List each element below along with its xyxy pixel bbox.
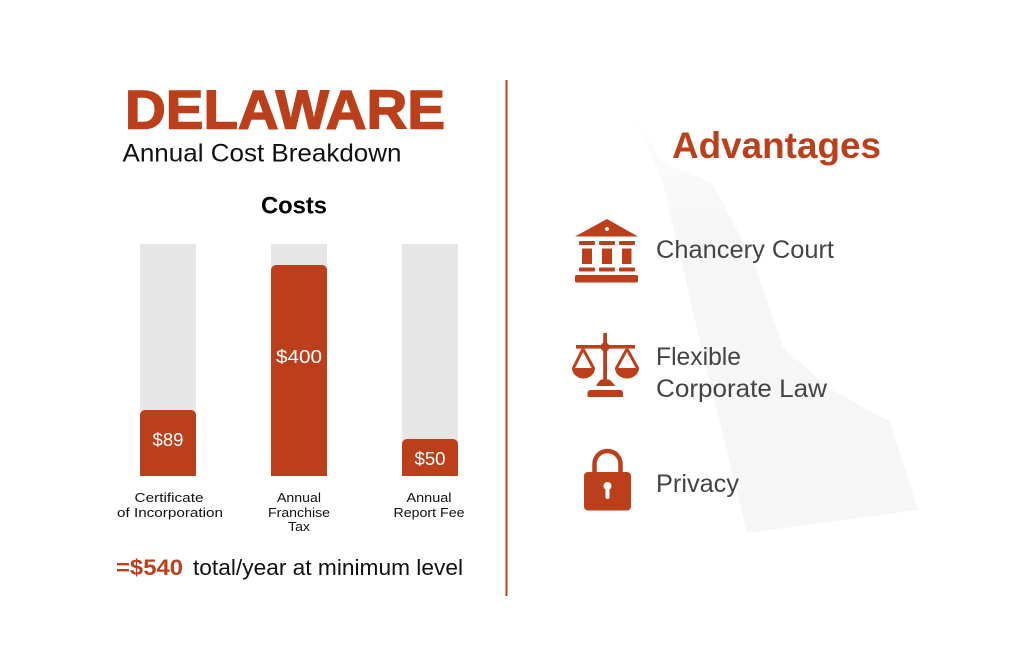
label: annual report fee: Report Fee: [394, 505, 464, 520]
label: annual franchise tax: Franchise: [268, 505, 330, 520]
subtitle: Annual Cost Breakdown: [122, 140, 402, 168]
icon: padlock: [584, 451, 631, 510]
label: certificate of incorporation: [117, 490, 223, 520]
text: flexible corporate law: [656, 343, 828, 403]
label: annual franchise tax: Tax: [288, 519, 311, 534]
icon: courthouse: [575, 219, 638, 282]
advantages heading: Advantages: [672, 125, 881, 166]
text: privacy: Privacy: [656, 470, 739, 498]
text: flexible corporate law: Flexible: [656, 343, 741, 371]
title: DELAWARE: [125, 78, 445, 140]
label: certificate of incorporation: Certificate: [134, 490, 204, 505]
label: certificate of incorporation: of Incorporation: [117, 505, 223, 520]
bar: annual report fee: [402, 244, 458, 476]
vertical divider: [506, 80, 508, 596]
chart heading: Costs: [261, 192, 327, 220]
bar: annual report fee: $50: [414, 449, 446, 469]
label: annual report fee: [394, 490, 464, 520]
bar: certificate of incorporation: $89: [152, 430, 184, 450]
label: annual franchise tax: Annual: [277, 490, 321, 505]
bar: annual franchise tax: $400: [276, 347, 322, 367]
label: annual franchise tax: [268, 490, 330, 534]
bar chart: costs: [140, 244, 458, 476]
icon: scales of justice: [572, 333, 639, 397]
Delaware state silhouette: [635, 117, 918, 533]
total callout: total/year at minimum level: [193, 555, 463, 580]
total callout: =$540: [116, 555, 183, 580]
label: annual report fee: Annual: [406, 490, 452, 505]
text: chancery court: Chancery Court: [656, 236, 834, 264]
bar: annual franchise tax: [271, 244, 327, 476]
text: flexible corporate law: Corporate Law: [656, 375, 828, 403]
bar: certificate of incorporation: [140, 244, 196, 476]
